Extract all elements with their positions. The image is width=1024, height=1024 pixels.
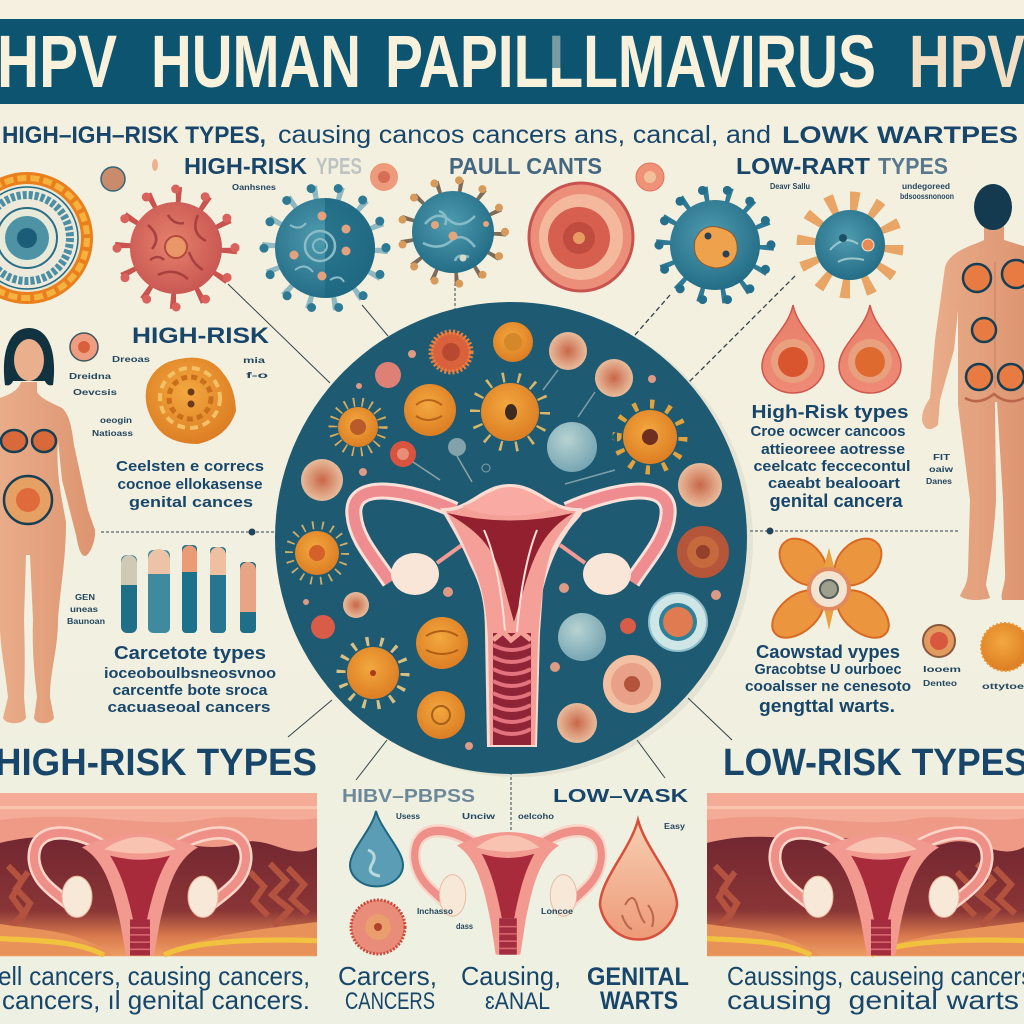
- icon: vaccine tubes: [121, 545, 256, 633]
- caption: left bottom: [0, 961, 310, 1015]
- caption: middle bottom: [338, 961, 689, 1015]
- tiny labels: Loncoe: [541, 907, 574, 916]
- text block: carcinoma types left: ioceoboulbsneosvnoo: [104, 665, 276, 682]
- icon: red virus: [117, 189, 235, 307]
- small labels: left: Oevcsis: [73, 388, 118, 397]
- text block: carcinoma types right: [745, 642, 911, 716]
- column headings: PAULL CANTS: [449, 153, 602, 179]
- icon: blue droplet: [350, 811, 403, 886]
- small labels: left: Natioass: [92, 429, 134, 438]
- small labels: left: Dreidna: [69, 372, 112, 381]
- text block: carcinoma types left: cacuaseoal cancers: [108, 699, 270, 716]
- small labels: right: Denteo: [923, 679, 957, 688]
- text block: high-risk types right: Croe ocwcer cancoos: [750, 423, 906, 440]
- icon: small cells right: [923, 623, 1024, 671]
- small labels: left: Baunoan: [67, 617, 105, 626]
- virus particles: [289, 322, 729, 750]
- subtitle: LOWK WARTPES: [782, 122, 1018, 149]
- icon: layered virus cross-section: [0, 178, 87, 298]
- small labels: left: mia: [243, 356, 266, 365]
- small labels: left: Dreoas: [112, 355, 151, 364]
- icon: salmon disc cell: [529, 183, 633, 291]
- icon: two droplets: [762, 305, 901, 393]
- text block: carcinoma types left: carcentfe bote sroca: [112, 682, 268, 699]
- small labels: right: Iooem: [923, 665, 961, 674]
- panel: right anatomy: [707, 793, 1024, 956]
- caption: middle bottom: ɛANAL: [485, 988, 550, 1015]
- text block: high-risk types right: [750, 402, 910, 511]
- icon: teal virus with orange core: [659, 189, 771, 301]
- text block: genital cancers left: [116, 458, 264, 511]
- title text: PAPILLLMAVIRUS: [385, 20, 876, 103]
- small labels: left: f-o: [246, 371, 268, 380]
- icon: large droplet: [600, 820, 677, 939]
- tiny labels: Easy: [664, 822, 686, 831]
- caption: middle bottom: CANCERS: [345, 988, 435, 1015]
- uterus diagram: [354, 484, 668, 747]
- title text: HUMAN: [151, 20, 361, 103]
- column headings: LOW-RART: [736, 153, 870, 179]
- title text: HPV: [0, 20, 117, 103]
- column headings: TYPES: [878, 153, 948, 179]
- tiny labels under headings: Oanhsnes: [232, 183, 277, 192]
- caption: middle bottom: Causing,: [461, 961, 561, 991]
- caption: middle bottom: Carcers,: [338, 961, 437, 991]
- tiny labels: [396, 812, 686, 931]
- caption: right bottom: [727, 961, 1024, 1015]
- caption: right bottom: causing genital warts: [727, 985, 1019, 1015]
- small labels: left: uneas: [70, 605, 99, 614]
- tiny labels under headings: Deavr Sallu: [770, 182, 810, 191]
- tiny labels under headings: bdsoossnonoon: [900, 192, 954, 201]
- small labels: right: Danes: [926, 477, 953, 486]
- tiny labels: dass: [456, 922, 474, 931]
- text block: high-risk types right: caeabt bealooart: [768, 475, 900, 492]
- small labels: right: oaiw: [929, 465, 954, 474]
- text block: high-risk types right: attieoreee aotresse: [761, 441, 905, 458]
- text block: genital cancers left: Ceelsten e correcs: [116, 458, 264, 475]
- column headings: HIGH-RISK: [184, 153, 307, 179]
- text block: carcinoma types left: [104, 643, 276, 716]
- icon: orange-spiked virus: [806, 201, 894, 289]
- column headings: [184, 153, 948, 179]
- subtitle: HIGH–IGH–RISK TYPES,: [2, 122, 266, 149]
- tiny labels under headings: [232, 182, 954, 201]
- heading: high-risk types: HIGH-RISK TYPES: [0, 742, 317, 784]
- body lesions: [963, 260, 1024, 390]
- connector lines: [101, 268, 960, 832]
- icon: orange cross cell: [763, 529, 898, 647]
- uterus diagram: [415, 831, 601, 955]
- text block: high-risk types right: ceelcatc feccecontul: [754, 458, 910, 475]
- tiny labels under headings: undegoreed: [902, 182, 950, 191]
- caption: left bottom: cancers, ıl genital cancers.: [2, 985, 310, 1015]
- text block: carcinoma types right: Gracobtse U ourboec: [754, 661, 902, 678]
- icon: orange virus cell: [146, 358, 236, 444]
- text block: genital cancers left: genital cances: [129, 494, 253, 511]
- icon: teal virus: [264, 187, 386, 309]
- small labels: right: [923, 453, 1024, 691]
- column headings: YPES: [316, 153, 362, 179]
- caption: middle bottom: WARTS: [600, 987, 678, 1015]
- panel: left anatomy: [0, 793, 317, 956]
- tiny labels: oelcoho: [518, 812, 554, 821]
- text block: genital cancers left: cocnoe ellokasense: [118, 476, 262, 493]
- middle headings: [342, 786, 688, 806]
- central circle panel: [275, 302, 753, 777]
- title banner: [0, 19, 1024, 104]
- text block: carcinoma types left: Carcetote types: [114, 643, 266, 663]
- text block: high-risk types right: High-Risk types: [752, 402, 908, 422]
- heading: high-risk: HIGH-RISK: [132, 323, 269, 348]
- icon: small cell near head: [70, 333, 98, 361]
- icon: blue virus: [401, 180, 505, 284]
- text block: carcinoma types right: gengttal warts.: [759, 696, 895, 716]
- middle headings: HIBV–PBPSS: [342, 786, 475, 806]
- small labels: right: ottytoe: [982, 682, 1024, 691]
- middle headings: LOW–VASK: [553, 786, 688, 806]
- small labels: right: FIT: [933, 453, 950, 462]
- small labels: left: [67, 355, 268, 626]
- icon: male figure: [922, 184, 1024, 600]
- caption: left bottom: ell cancers, causing cancers,: [0, 961, 310, 991]
- small labels: left: oeogin: [100, 416, 132, 425]
- title text: [0, 20, 1024, 103]
- caption: middle bottom: GENITAL: [587, 963, 689, 991]
- panel: middle diagrams: [342, 786, 688, 955]
- subtitle: causing cancos cancers ans, cancal, and: [278, 121, 771, 149]
- small labels: left: GEN: [75, 593, 95, 602]
- tiny labels: Usess: [396, 812, 421, 821]
- text block: carcinoma types right: Caowstad vypes: [756, 642, 900, 662]
- text block: high-risk types right: genital cancera: [770, 491, 904, 511]
- body lesions: [1, 430, 56, 524]
- tiny labels: Unciw: [462, 812, 496, 821]
- subtitle: [2, 121, 1018, 149]
- icon: female figure: [0, 328, 95, 723]
- icon: small cell dots: [101, 159, 664, 191]
- text block: carcinoma types right: cooalsser ne cenesoto: [745, 678, 911, 695]
- tiny labels: Inchasso: [417, 907, 453, 916]
- icon: spiky cell: [351, 900, 405, 954]
